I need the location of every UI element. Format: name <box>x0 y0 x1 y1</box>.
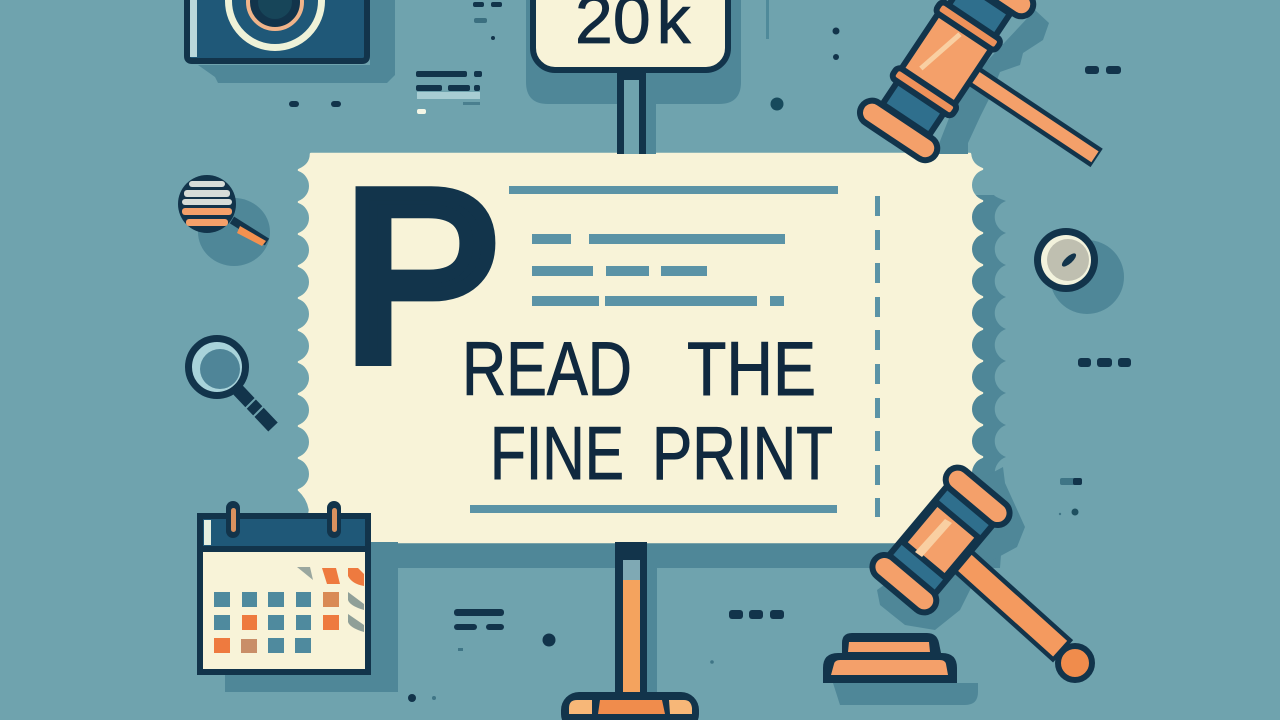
heading: read the fine print <box>462 327 833 495</box>
sign board <box>533 0 728 70</box>
gavel ball end <box>1058 646 1092 680</box>
ticket <box>299 154 982 542</box>
gavel handle <box>966 66 1103 167</box>
decorative marks: bottom <box>408 609 784 702</box>
icon: magnifying glass <box>188 338 273 427</box>
calendar rings <box>226 501 341 538</box>
calendar date cells <box>214 567 364 653</box>
perforation dashed line <box>875 196 880 517</box>
icon: calendar <box>200 501 398 692</box>
calendar body <box>200 516 368 672</box>
icon: round dial <box>1034 228 1098 292</box>
top gavel shadow <box>935 10 1049 154</box>
post base <box>561 692 699 720</box>
heading: read the fine print: PRINT <box>652 411 833 495</box>
gavel highlight <box>915 519 952 557</box>
clock shadow <box>1050 240 1124 314</box>
icon: striped magnifier <box>178 175 267 246</box>
price sign with 20k <box>526 0 741 154</box>
ticket shadow <box>370 195 1006 568</box>
gavel head <box>868 463 1014 617</box>
large letter P: P <box>343 142 501 411</box>
heading: read the fine print: READ <box>462 327 632 412</box>
sign post <box>617 70 646 154</box>
magnifier shadow <box>198 198 270 266</box>
icon: bottom gavel <box>823 463 1092 705</box>
sound block <box>823 633 978 705</box>
decorative marks: right side <box>1059 358 1131 516</box>
calendar shadow <box>225 542 398 692</box>
fine print placeholder lines <box>470 186 838 513</box>
decorative marks: top right <box>766 0 1121 110</box>
gavel handle <box>948 545 1073 662</box>
icon: top gavel <box>855 0 1151 240</box>
bottom gavel shadow <box>877 467 1025 630</box>
icon: camera <box>187 0 395 83</box>
sign shadow <box>526 0 741 104</box>
calendar header <box>203 519 365 552</box>
bottom post <box>561 542 699 720</box>
decorative marks: top left <box>289 2 502 114</box>
gavel head <box>855 0 1038 165</box>
heading: read the fine print: FINE <box>490 411 624 495</box>
heading: read the fine print: THE <box>687 327 816 412</box>
